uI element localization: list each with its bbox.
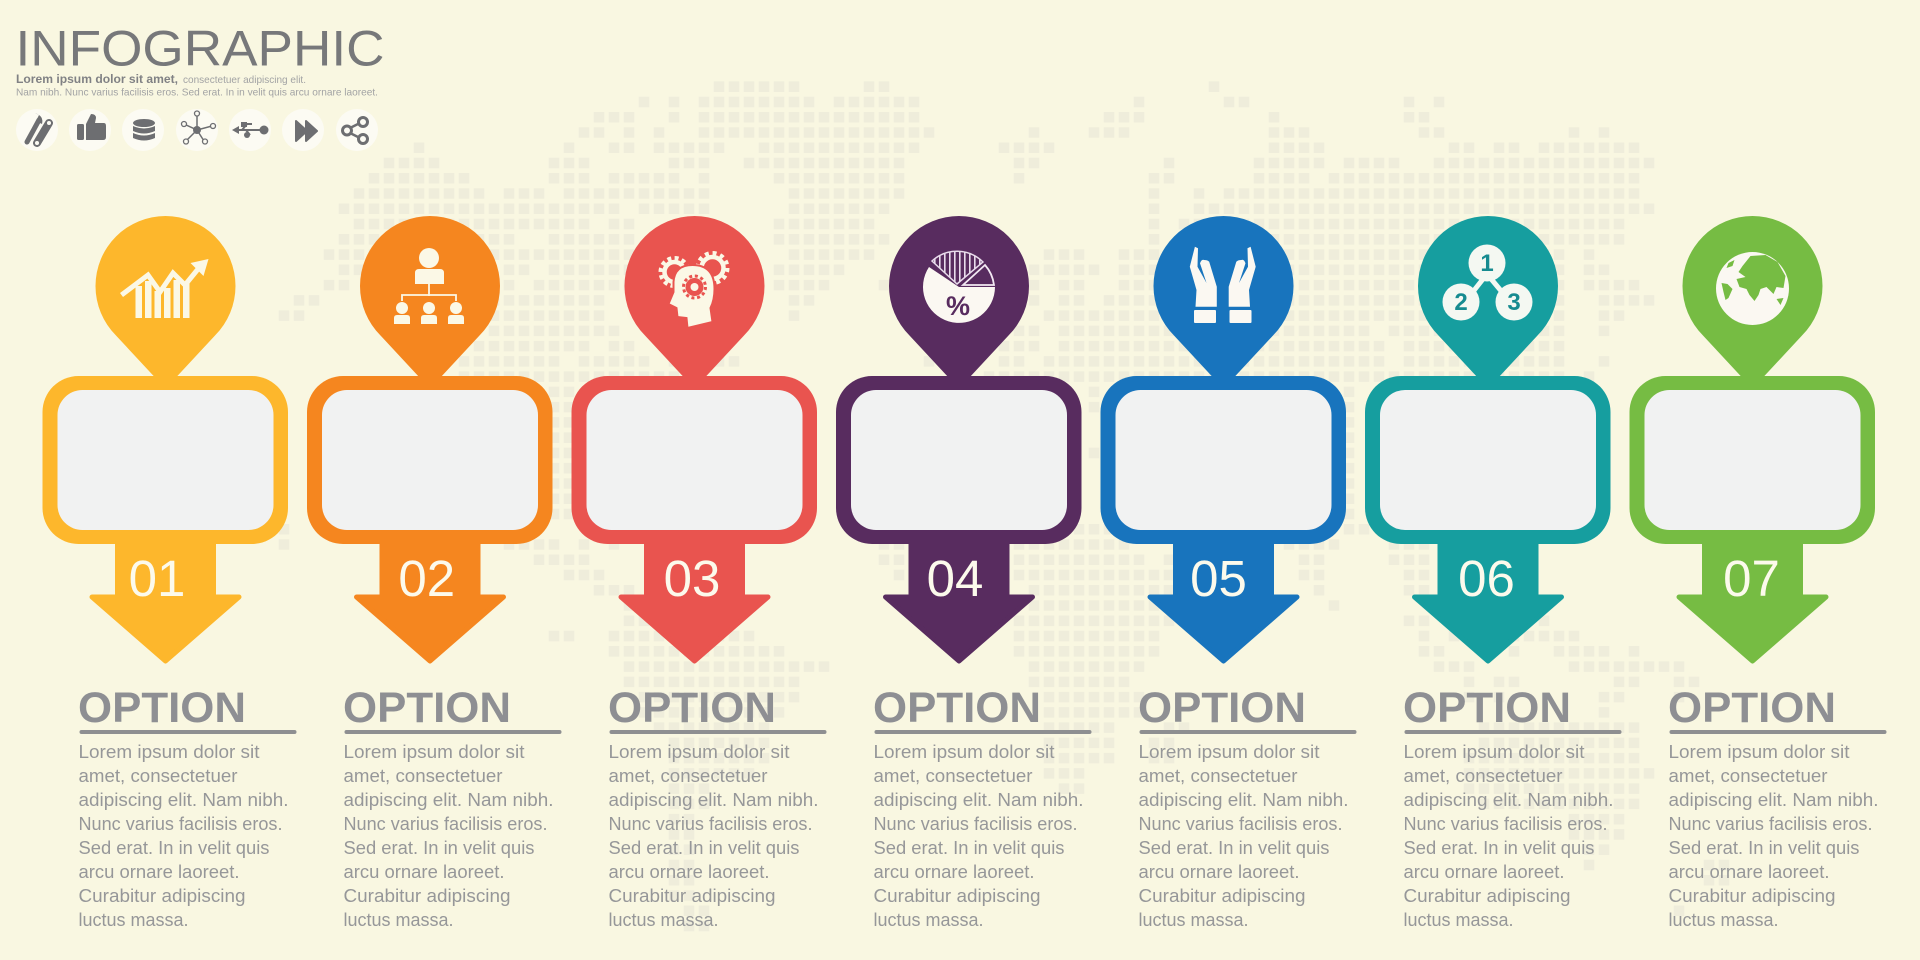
body text 02: amet, consectetuer	[344, 766, 502, 786]
number 06: 06	[1458, 550, 1515, 607]
heading 06: OPTION	[1403, 684, 1571, 732]
body text 05: Lorem ipsum dolor sit	[1138, 742, 1320, 762]
underline 02	[344, 730, 562, 734]
text box 02	[322, 390, 538, 530]
body text 01: Curabitur adipiscing	[78, 886, 245, 906]
body text 07: luctus massa.	[1668, 910, 1778, 930]
arrow 05	[1150, 540, 1297, 661]
pin 01	[96, 216, 236, 378]
icon: database	[122, 109, 164, 151]
body text 07: Sed erat. In in velit quis	[1668, 838, 1860, 858]
arrow 02	[356, 540, 504, 661]
body text 05	[1138, 742, 1348, 930]
heading 03: OPTION	[608, 684, 776, 732]
text box 04	[851, 390, 1067, 530]
icon: globe	[1716, 252, 1789, 325]
body text 01: amet, consectetuer	[78, 766, 238, 786]
body text 02: Sed erat. In in velit quis	[344, 838, 534, 858]
body text 07: adipiscing elit. Nam nibh.	[1668, 790, 1878, 810]
icon: pie chart percent	[923, 251, 995, 323]
underline 05	[1140, 730, 1356, 734]
title: INFOGRAPHIC	[16, 20, 384, 76]
subtitle text: Nam nibh. Nunc varius facilisis eros. Sed erat. In in velit quis arcu ornare laoreet.	[16, 87, 378, 99]
body text 06	[1404, 742, 1614, 930]
body text 05: Sed erat. In in velit quis	[1138, 838, 1330, 858]
panel: option 07	[1630, 216, 1886, 930]
body text 02: luctus massa.	[344, 910, 454, 930]
number 02: 02	[398, 550, 455, 607]
icon: numbered nodes: 2	[1454, 289, 1468, 316]
body text 04	[874, 742, 1084, 930]
pin 02	[360, 216, 500, 378]
body text 01: Sed erat. In in velit quis	[78, 838, 270, 858]
body text 06: amet, consectetuer	[1404, 766, 1562, 786]
panel: option 06	[1365, 216, 1622, 930]
body text 04: Nunc varius facilisis eros.	[874, 814, 1078, 834]
body text 06: Sed erat. In in velit quis	[1404, 838, 1594, 858]
frame 03	[572, 376, 817, 544]
text box 01	[58, 390, 274, 530]
icon row	[16, 109, 378, 151]
body text 07: amet, consectetuer	[1668, 766, 1828, 786]
heading 02: OPTION	[343, 684, 511, 732]
body text 05: arcu ornare laoreet.	[1138, 862, 1300, 882]
body text 04: luctus massa.	[874, 910, 984, 930]
body text 07: Lorem ipsum dolor sit	[1668, 742, 1850, 762]
icon: head with gears	[660, 253, 728, 328]
body text 03	[608, 742, 818, 930]
body text 01	[78, 742, 288, 930]
pin 07	[1682, 216, 1822, 378]
icon: growth chart	[122, 259, 208, 318]
icon: pie chart percent: %	[946, 291, 970, 321]
number 07: 07	[1723, 550, 1780, 607]
pin 05	[1154, 216, 1294, 378]
body text 07: Curabitur adipiscing	[1668, 886, 1835, 906]
body text 03: Sed erat. In in velit quis	[608, 838, 800, 858]
body text 02	[344, 742, 554, 930]
number 04: 04	[927, 550, 983, 607]
pin 03	[624, 216, 764, 378]
body text 04: amet, consectetuer	[874, 766, 1032, 786]
icon: usb	[229, 109, 271, 151]
icon: numbered nodes: 1	[1480, 250, 1494, 277]
body text 04: Curabitur adipiscing	[874, 886, 1040, 906]
arrow 04	[886, 540, 1032, 661]
underline 04	[874, 730, 1092, 734]
body text 05: luctus massa.	[1138, 910, 1248, 930]
frame 02	[307, 376, 552, 544]
icon: wrenches	[16, 109, 58, 151]
underline 06	[1404, 730, 1622, 734]
arrow 03	[621, 540, 768, 661]
body text 06: luctus massa.	[1404, 910, 1514, 930]
icon: org chart	[394, 248, 464, 324]
body text 02: arcu ornare laoreet.	[344, 862, 504, 882]
text box 06	[1380, 390, 1596, 530]
underline 07	[1670, 730, 1886, 734]
number 03: 03	[664, 550, 720, 607]
icon: network	[176, 109, 218, 151]
body text 06: Curabitur adipiscing	[1404, 886, 1570, 906]
body text 02: Curabitur adipiscing	[344, 886, 510, 906]
frame 04	[836, 376, 1082, 544]
body text 04: arcu ornare laoreet.	[874, 862, 1034, 882]
text box 07	[1644, 390, 1860, 530]
pin 04	[889, 216, 1029, 378]
body text 05: Nunc varius facilisis eros.	[1138, 814, 1342, 834]
body text 05: Curabitur adipiscing	[1138, 886, 1305, 906]
icon: numbered nodes: 3	[1507, 289, 1521, 316]
frame 01	[42, 376, 288, 544]
underline 03	[610, 730, 826, 734]
body text 07: Nunc varius facilisis eros.	[1668, 814, 1872, 834]
body text 03: arcu ornare laoreet.	[608, 862, 770, 882]
heading 07: OPTION	[1668, 684, 1836, 732]
body text 01: luctus massa.	[78, 910, 188, 930]
arrow 07	[1679, 540, 1826, 661]
body text 03: luctus massa.	[608, 910, 718, 930]
body text 03: amet, consectetuer	[608, 766, 768, 786]
body text 07: arcu ornare laoreet.	[1668, 862, 1830, 882]
body text 02: Nunc varius facilisis eros.	[344, 814, 548, 834]
number 01: 01	[129, 550, 185, 607]
subtitle text: Lorem ipsum dolor sit amet,	[16, 74, 178, 86]
subtitle text	[16, 74, 378, 99]
frame 05	[1100, 376, 1346, 544]
body text 05: adipiscing elit. Nam nibh.	[1138, 790, 1348, 810]
body text 03: Nunc varius facilisis eros.	[608, 814, 812, 834]
body text 06: adipiscing elit. Nam nibh.	[1404, 790, 1614, 810]
body text 03: Curabitur adipiscing	[608, 886, 775, 906]
icon: numbered nodes	[1442, 244, 1532, 320]
frame 06	[1365, 376, 1610, 544]
heading 05: OPTION	[1138, 684, 1306, 732]
body text 02: Lorem ipsum dolor sit	[344, 742, 524, 762]
body text 06: Lorem ipsum dolor sit	[1404, 742, 1584, 762]
body text 02: adipiscing elit. Nam nibh.	[344, 790, 554, 810]
arrow 06	[1414, 540, 1562, 661]
heading 01: OPTION	[78, 684, 246, 732]
panel: option 02	[307, 216, 562, 930]
body text 06: Nunc varius facilisis eros.	[1404, 814, 1608, 834]
body text 01: adipiscing elit. Nam nibh.	[78, 790, 288, 810]
background dotted world map	[279, 87, 1729, 926]
text box 05	[1116, 390, 1332, 530]
body text 04: Lorem ipsum dolor sit	[874, 742, 1054, 762]
arrow 01	[92, 540, 239, 661]
body text 05: amet, consectetuer	[1138, 766, 1298, 786]
body text 03: adipiscing elit. Nam nibh.	[608, 790, 818, 810]
pin 06	[1418, 216, 1558, 378]
body text 04: adipiscing elit. Nam nibh.	[874, 790, 1084, 810]
number 05: 05	[1190, 550, 1247, 607]
body text 01: Lorem ipsum dolor sit	[78, 742, 260, 762]
text box 03	[586, 390, 802, 530]
icon: open hands	[1190, 247, 1256, 323]
heading 04: OPTION	[873, 684, 1041, 732]
subtitle text: consectetuer adipiscing elit.	[183, 74, 306, 86]
body text 04: Sed erat. In in velit quis	[874, 838, 1064, 858]
panel: option 01	[42, 216, 296, 930]
body text 03: Lorem ipsum dolor sit	[608, 742, 790, 762]
panel: option 03	[572, 216, 826, 930]
panel: option 04	[836, 216, 1092, 930]
underline 01	[80, 730, 296, 734]
body text 01: arcu ornare laoreet.	[78, 862, 240, 882]
panel: option 05	[1100, 216, 1356, 930]
body text 07	[1668, 742, 1878, 930]
icon: thumbs up	[69, 109, 111, 151]
body text 06: arcu ornare laoreet.	[1404, 862, 1564, 882]
body text 01: Nunc varius facilisis eros.	[78, 814, 282, 834]
icon: fast forward	[282, 109, 324, 151]
frame 07	[1630, 376, 1875, 544]
icon: share	[336, 109, 378, 151]
